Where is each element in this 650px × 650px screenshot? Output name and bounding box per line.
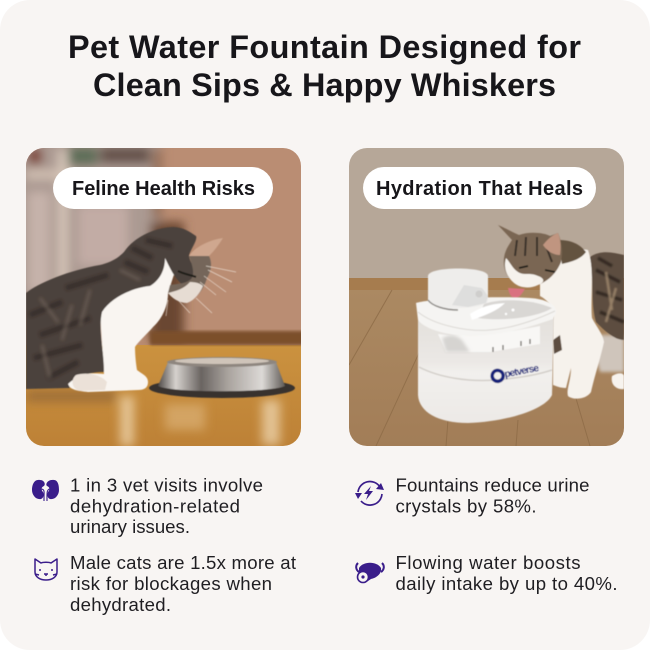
- wooden floor: [349, 290, 624, 447]
- icon: cycle with bolt: [355, 481, 384, 505]
- text: vet visits stat: dehydration-related: [70, 496, 240, 516]
- room background: [349, 148, 624, 290]
- text: urine crystals stat: crystals by 58%.: [396, 496, 536, 516]
- cat ear inner: [543, 233, 561, 255]
- cat white chest and legs: [540, 249, 604, 399]
- fill window band: [438, 326, 540, 352]
- icon: kidneys: [32, 480, 59, 501]
- text: urine crystals stat: [396, 474, 590, 516]
- brand logo: [491, 362, 540, 383]
- cat rear belly: [590, 335, 624, 372]
- lower tank: [418, 312, 554, 423]
- tabby cat drinking: [498, 225, 624, 399]
- text: vet visits stat: urinary issues.: [70, 516, 190, 537]
- title: [68, 29, 581, 103]
- kitten silhouette white: [68, 252, 178, 392]
- motor cap: [427, 268, 489, 301]
- cat white muzzle: [505, 258, 543, 287]
- top tray: [416, 297, 556, 336]
- steel food bowl: [149, 357, 295, 398]
- icon: bladder with stone: [356, 563, 384, 583]
- water fountain: [416, 268, 556, 423]
- text: vet visits stat: 1 in 3 vet visits involve: [70, 474, 263, 496]
- title: Pet Water Fountain Designed for: [68, 29, 581, 65]
- icon: cat face: [35, 559, 57, 580]
- cat shoulder patch: [558, 240, 586, 264]
- text: male cats stat: Male cats are 1.5x more at: [70, 552, 297, 573]
- kitten: [26, 227, 236, 392]
- water dish: [478, 300, 552, 319]
- brand logo: petverse: [504, 363, 540, 380]
- text: vet visits stat: [70, 474, 263, 537]
- text: water intake stat: daily intake by up to 40%.: [396, 573, 618, 594]
- cat head: [498, 225, 562, 287]
- cat tabby back: [590, 252, 624, 340]
- kitten ear: [189, 238, 223, 258]
- text: urine crystals stat: Fountains reduce urine: [396, 474, 590, 496]
- label pill: Feline Health Risks: [53, 167, 273, 209]
- label pill: Feline Health Risks: Feline Health Risks: [72, 178, 255, 200]
- panel: hydration that heals photo: [349, 148, 624, 447]
- text: water intake stat: [396, 552, 618, 594]
- text: male cats stat: [70, 552, 297, 615]
- panel: feline health risks photo: [15, 140, 305, 447]
- text: male cats stat: dehydrated.: [70, 594, 171, 615]
- kitten head and muzzle: [168, 256, 212, 294]
- room background: [15, 140, 301, 348]
- label pill: Hydration That Heals: Hydration That Heals: [376, 178, 583, 200]
- title: Clean Sips & Happy Whiskers: [93, 67, 556, 103]
- inner shadow of pump: [442, 335, 470, 352]
- text: water intake stat: Flowing water boosts: [396, 552, 580, 573]
- label pill: Hydration That Heals: [363, 167, 596, 209]
- text: male cats stat: risk for blockages when: [70, 573, 272, 594]
- cat tongue: [508, 288, 525, 298]
- kitten fur dark: [26, 227, 201, 389]
- wooden floor: [26, 331, 305, 447]
